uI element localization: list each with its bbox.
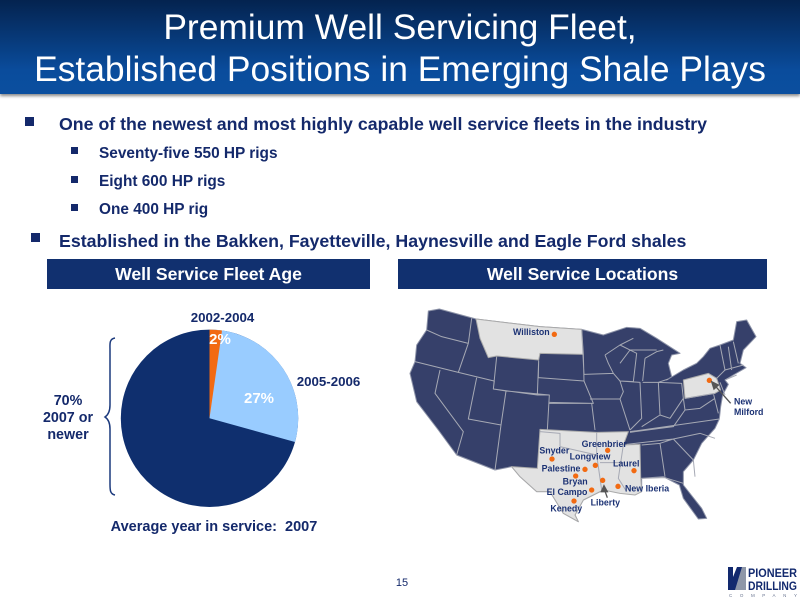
map arrows bbox=[601, 382, 731, 498]
label: 70% 2007 or newer: newer bbox=[47, 427, 89, 443]
map city labels: New Iberia bbox=[625, 484, 669, 494]
map city labels: Laurel bbox=[613, 458, 640, 468]
bullet: shales: Established in the Bakken, Fayetteville, Haynesville and Eagle Ford shales bbox=[59, 231, 686, 251]
pie chart panel bbox=[43, 310, 360, 535]
map city labels bbox=[513, 327, 763, 514]
map: United States bbox=[410, 309, 756, 522]
map city labels: Williston bbox=[513, 327, 550, 337]
logo bbox=[728, 566, 797, 598]
label: 70% 2007 or newer: 2007 or bbox=[43, 410, 93, 426]
bullet list bbox=[25, 114, 707, 251]
logo: COMPANY bbox=[729, 593, 797, 598]
logo mark bbox=[728, 567, 746, 590]
label: 2005-2006: 2005-2006 bbox=[297, 374, 360, 389]
map city labels: Longview bbox=[570, 452, 611, 462]
map city labels: El Campo bbox=[547, 487, 588, 497]
panel heading: fleet age bbox=[47, 259, 370, 289]
title banner bbox=[0, 0, 800, 94]
map city labels: Palestine bbox=[542, 464, 581, 474]
panel heading: locations: Well Service Locations bbox=[487, 264, 678, 284]
label: 2002-2004: 2002-2004 bbox=[191, 310, 255, 325]
sub-bullet: 400 HP: One 400 HP rig bbox=[99, 201, 208, 218]
label: 70% 2007 or newer: 70% bbox=[54, 393, 83, 409]
title banner: Premium Well Servicing Fleet, bbox=[163, 7, 637, 47]
panel heading: fleet age: Well Service Fleet Age bbox=[115, 264, 302, 284]
title banner: Established Positions in Emerging Shale Plays bbox=[34, 49, 766, 89]
map city labels: Liberty bbox=[591, 498, 620, 508]
pie chart: 27% bbox=[244, 390, 274, 407]
brace bbox=[105, 338, 115, 495]
page number: 15 bbox=[396, 577, 408, 589]
pie chart: 2% bbox=[209, 331, 231, 348]
map city labels: New bbox=[734, 396, 752, 406]
map city labels: Milford bbox=[734, 407, 763, 417]
map site markers bbox=[549, 332, 712, 504]
map city labels: Kenedy bbox=[550, 504, 582, 514]
sub-bullet: 550 HP: Seventy-five 550 HP rigs bbox=[99, 145, 278, 162]
bullet: newest fleet: One of the newest and most highly capable well service fleets in the industry bbox=[59, 114, 707, 134]
map city labels: Greenbrier bbox=[582, 439, 627, 449]
map city labels: Bryan bbox=[563, 476, 588, 486]
US map panel bbox=[410, 308, 763, 522]
panel heading: locations bbox=[398, 259, 767, 289]
sub-bullet: 600 HP: Eight 600 HP rigs bbox=[99, 173, 225, 190]
caption: average year: Average year in service: 2007 bbox=[111, 519, 317, 535]
map city labels: Snyder bbox=[539, 446, 570, 456]
pie chart bbox=[121, 330, 298, 507]
